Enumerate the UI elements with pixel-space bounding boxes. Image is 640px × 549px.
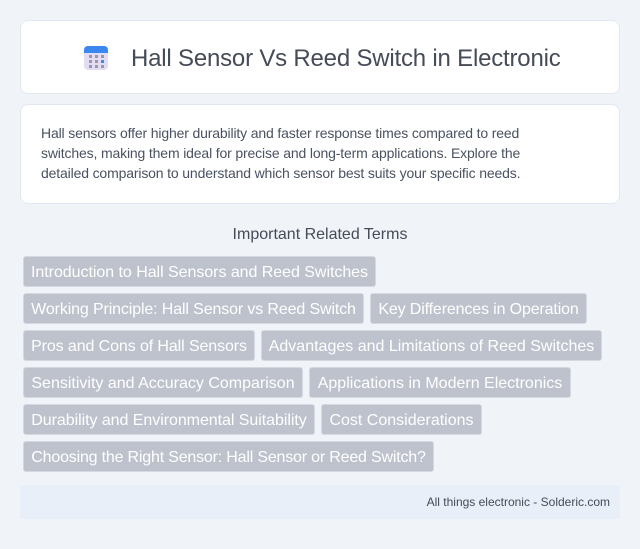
intro text: switches, making them ideal for precise and long-term applications. Explore the — [41, 145, 520, 161]
icon: calendar — [84, 46, 108, 70]
related terms tags: Key Differences in Operation — [378, 301, 579, 318]
related terms tags: Durability and Environmental Suitability — [31, 412, 307, 429]
related terms tags: Choosing the Right Sensor: Hall Sensor or Reed Switch? — [31, 449, 426, 466]
footer text: All things electronic - Solderic.com — [427, 495, 610, 509]
related terms tags: Sensitivity and Accuracy Comparison — [31, 375, 295, 392]
related terms tags: Working Principle: Hall Sensor vs Reed Switch — [31, 301, 356, 318]
related terms tags: Applications in Modern Electronics — [318, 375, 562, 392]
title: Hall Sensor Vs Reed Switch in Electronic — [131, 45, 561, 72]
related terms tags: Introduction to Hall Sensors and Reed Switches — [31, 264, 368, 281]
intro text: Hall sensors offer higher durability and faster response times compared to reed — [41, 125, 519, 141]
related terms tags: Pros and Cons of Hall Sensors — [31, 338, 247, 355]
related terms tags: Advantages and Limitations of Reed Switches — [269, 338, 594, 355]
footer — [20, 485, 620, 519]
header card — [20, 20, 620, 94]
intro card — [20, 104, 620, 204]
intro text: detailed comparison to understand which sensor best suits your specific needs. — [41, 165, 520, 181]
related terms tags: Cost Considerations — [329, 412, 474, 429]
related terms tags — [23, 256, 602, 472]
intro text — [41, 125, 520, 181]
related terms heading: Important Related Terms — [233, 226, 407, 243]
